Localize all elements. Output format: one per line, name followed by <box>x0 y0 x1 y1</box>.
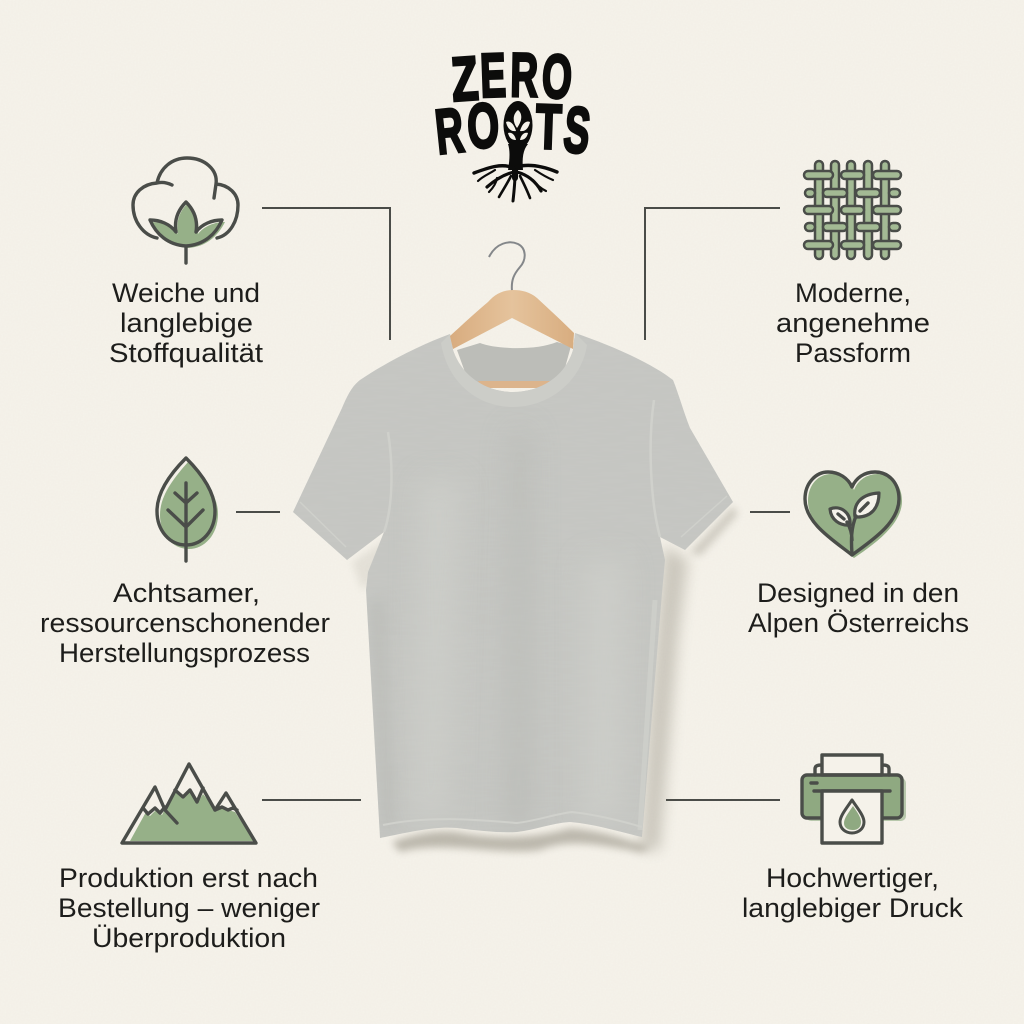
icon: mountains <box>122 764 256 843</box>
feature: designed in Austria <box>748 472 969 638</box>
logo word ROOTS <box>432 91 593 168</box>
feature: made to order <box>58 764 320 953</box>
label: sustainable production: ressourcenschonender <box>40 608 330 638</box>
label: designed in Austria <box>748 578 969 638</box>
feature: sustainable production <box>40 458 330 668</box>
shirt shading and folds <box>300 400 727 828</box>
label: designed in Austria: Alpen Österreichs <box>748 608 969 638</box>
label: made to order: Produktion erst nach <box>59 863 318 893</box>
label: sustainable production <box>40 578 330 668</box>
connector lines <box>236 208 790 800</box>
logo word ZERO: R <box>510 40 539 110</box>
shirt body <box>293 333 733 838</box>
label: fabric quality: Weiche und <box>112 278 260 308</box>
hanger bar <box>478 381 552 388</box>
label: durable print <box>742 863 964 923</box>
logo word ROOTS: O <box>466 91 500 162</box>
feature: fabric quality <box>109 158 264 368</box>
icon: heart with sprout <box>805 472 902 558</box>
label: made to order: Bestellung – weniger <box>58 893 320 923</box>
t-shirt and hanger <box>280 242 750 852</box>
hanger hook <box>489 242 525 291</box>
logo word ZERO: E <box>479 40 507 110</box>
icon: leaf <box>157 458 218 561</box>
icon: woven fabric <box>808 165 897 255</box>
icon: printer <box>802 755 906 843</box>
logo word ZERO: O <box>540 41 574 112</box>
label: fabric quality: langlebige <box>120 308 253 338</box>
icon: cotton boll <box>133 158 238 263</box>
label: modern fit: Moderne, <box>795 278 911 308</box>
hanger wood <box>450 290 574 349</box>
back of collar <box>457 342 571 386</box>
logo word ZERO: Z <box>449 45 480 115</box>
label: durable print: langlebiger Druck <box>742 893 964 923</box>
label: modern fit: Passform <box>795 338 911 368</box>
feature: durable print <box>742 755 964 923</box>
logo word ROOTS: R <box>432 96 467 168</box>
logo leaf and roots <box>474 101 557 201</box>
logo word ROOTS: T <box>535 92 563 163</box>
feature: modern fit <box>776 165 930 368</box>
label: durable print: Hochwertiger, <box>766 863 939 893</box>
logo word ROOTS: S <box>560 94 593 168</box>
label: modern fit <box>776 278 930 368</box>
label: designed in Austria: Designed in den <box>757 578 959 608</box>
label: sustainable production: Herstellungsprozess <box>59 638 310 668</box>
label: modern fit: angenehme <box>776 308 930 338</box>
logo: Zero Roots <box>432 40 593 201</box>
label: fabric quality: Stoffqualität <box>109 338 264 368</box>
shirt shadow <box>352 506 738 852</box>
label: sustainable production: Achtsamer, <box>113 578 260 608</box>
label: made to order <box>58 863 320 953</box>
label: made to order: Überproduktion <box>92 923 286 953</box>
shirt collar ribbing <box>441 333 587 407</box>
logo word ZERO <box>449 40 574 115</box>
label: fabric quality <box>109 278 264 368</box>
